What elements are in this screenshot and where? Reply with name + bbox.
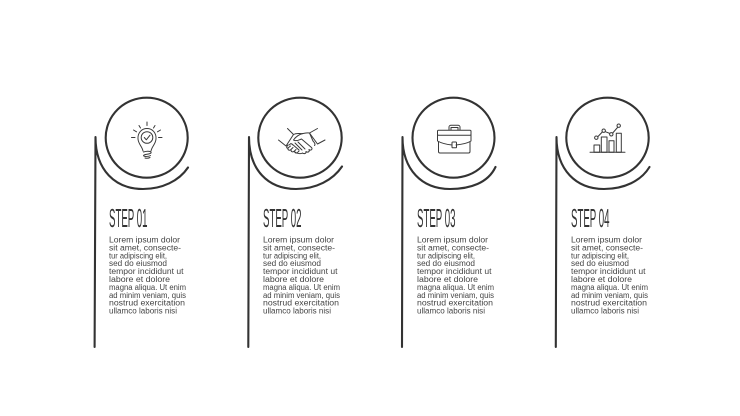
text block: step 02: sit amet, consecte- xyxy=(263,243,335,252)
text block: step 03: nostrud exercitation xyxy=(417,299,493,308)
text block: step 02: tur adipiscing elit, xyxy=(263,251,321,260)
circle outline xyxy=(412,98,494,178)
text block: step 04: sed do eiusmod xyxy=(571,259,629,268)
text block: step 01: labore et dolore xyxy=(109,275,171,284)
text block: step 03: Lorem ipsum dolor xyxy=(417,236,488,244)
text block: step 02: ullamco laboris nisi xyxy=(263,307,331,316)
text block: step 04: ullamco laboris nisi xyxy=(571,307,639,316)
icon: briefcase xyxy=(438,125,471,153)
text block: step 03: magna aliqua. Ut enim xyxy=(417,283,494,292)
text block: step 04: magna aliqua. Ut enim xyxy=(571,283,648,292)
panel: step 01 xyxy=(95,98,188,347)
text block: step 01: nostrud exercitation xyxy=(109,299,185,308)
text block: step 02: ad minim veniam, quis xyxy=(263,291,340,300)
swoosh arc and vertical line xyxy=(95,137,188,347)
text block: step 02: nostrud exercitation xyxy=(263,299,339,308)
circle outline xyxy=(106,98,188,178)
text block: step 04: sit amet, consecte- xyxy=(571,243,643,252)
icon: light bulb xyxy=(132,122,162,158)
panel: step 04 xyxy=(556,98,650,347)
text block: step 03: ullamco laboris nisi xyxy=(417,307,485,316)
text block: step 03: sit amet, consecte- xyxy=(417,243,489,252)
text block: step 02 xyxy=(263,236,340,316)
text block: step 01: Lorem ipsum dolor xyxy=(109,236,180,244)
text block: step 02: magna aliqua. Ut enim xyxy=(263,283,340,292)
text block: step 04: nostrud exercitation xyxy=(571,299,647,308)
text block: step 04: tur adipiscing elit, xyxy=(571,251,629,260)
text block: step 04 xyxy=(571,236,648,316)
text block: step 01: tempor incididunt ut xyxy=(109,267,184,276)
text block: step 01: tur adipiscing elit, xyxy=(109,251,167,260)
text block: step 03: ad minim veniam, quis xyxy=(417,291,494,300)
text block: step 03: sed do eiusmod xyxy=(417,259,475,268)
swoosh arc and vertical line xyxy=(556,137,650,347)
text block: step 03: tempor incididunt ut xyxy=(417,267,492,276)
text block: step 02: labore et dolore xyxy=(263,275,325,284)
text block: step 01: sed do eiusmod xyxy=(109,259,167,268)
text block: step 02: Lorem ipsum dolor xyxy=(263,236,334,244)
circle outline xyxy=(566,98,649,178)
text: STEP 01 xyxy=(109,203,148,233)
text block: step 03 xyxy=(417,236,494,316)
swoosh arc and vertical line xyxy=(402,137,496,347)
icon: handshake xyxy=(278,128,325,154)
text block: step 03: labore et dolore xyxy=(417,275,479,284)
text block: step 03: tur adipiscing elit, xyxy=(417,251,475,260)
text block: step 01: ullamco laboris nisi xyxy=(109,307,177,316)
icon: bar chart xyxy=(590,124,625,152)
circle outline xyxy=(258,98,342,178)
text block: step 02: sed do eiusmod xyxy=(263,259,321,268)
text block: step 01: ad minim veniam, quis xyxy=(109,291,186,300)
text: STEP 02 xyxy=(263,203,302,233)
text block: step 01 xyxy=(109,236,186,316)
panel: step 02 xyxy=(248,98,342,347)
text block: step 01: sit amet, consecte- xyxy=(109,243,181,252)
swoosh arc and vertical line xyxy=(248,137,342,347)
text block: step 02: tempor incididunt ut xyxy=(263,267,338,276)
text block: step 04: labore et dolore xyxy=(571,275,633,284)
text block: step 04: tempor incididunt ut xyxy=(571,267,646,276)
text: STEP 04 xyxy=(571,203,610,233)
text block: step 04: ad minim veniam, quis xyxy=(571,291,648,300)
text: STEP 03 xyxy=(417,203,456,233)
panel: step 03 xyxy=(402,98,496,347)
text block: step 04: Lorem ipsum dolor xyxy=(571,236,642,244)
text block: step 01: magna aliqua. Ut enim xyxy=(109,283,186,292)
